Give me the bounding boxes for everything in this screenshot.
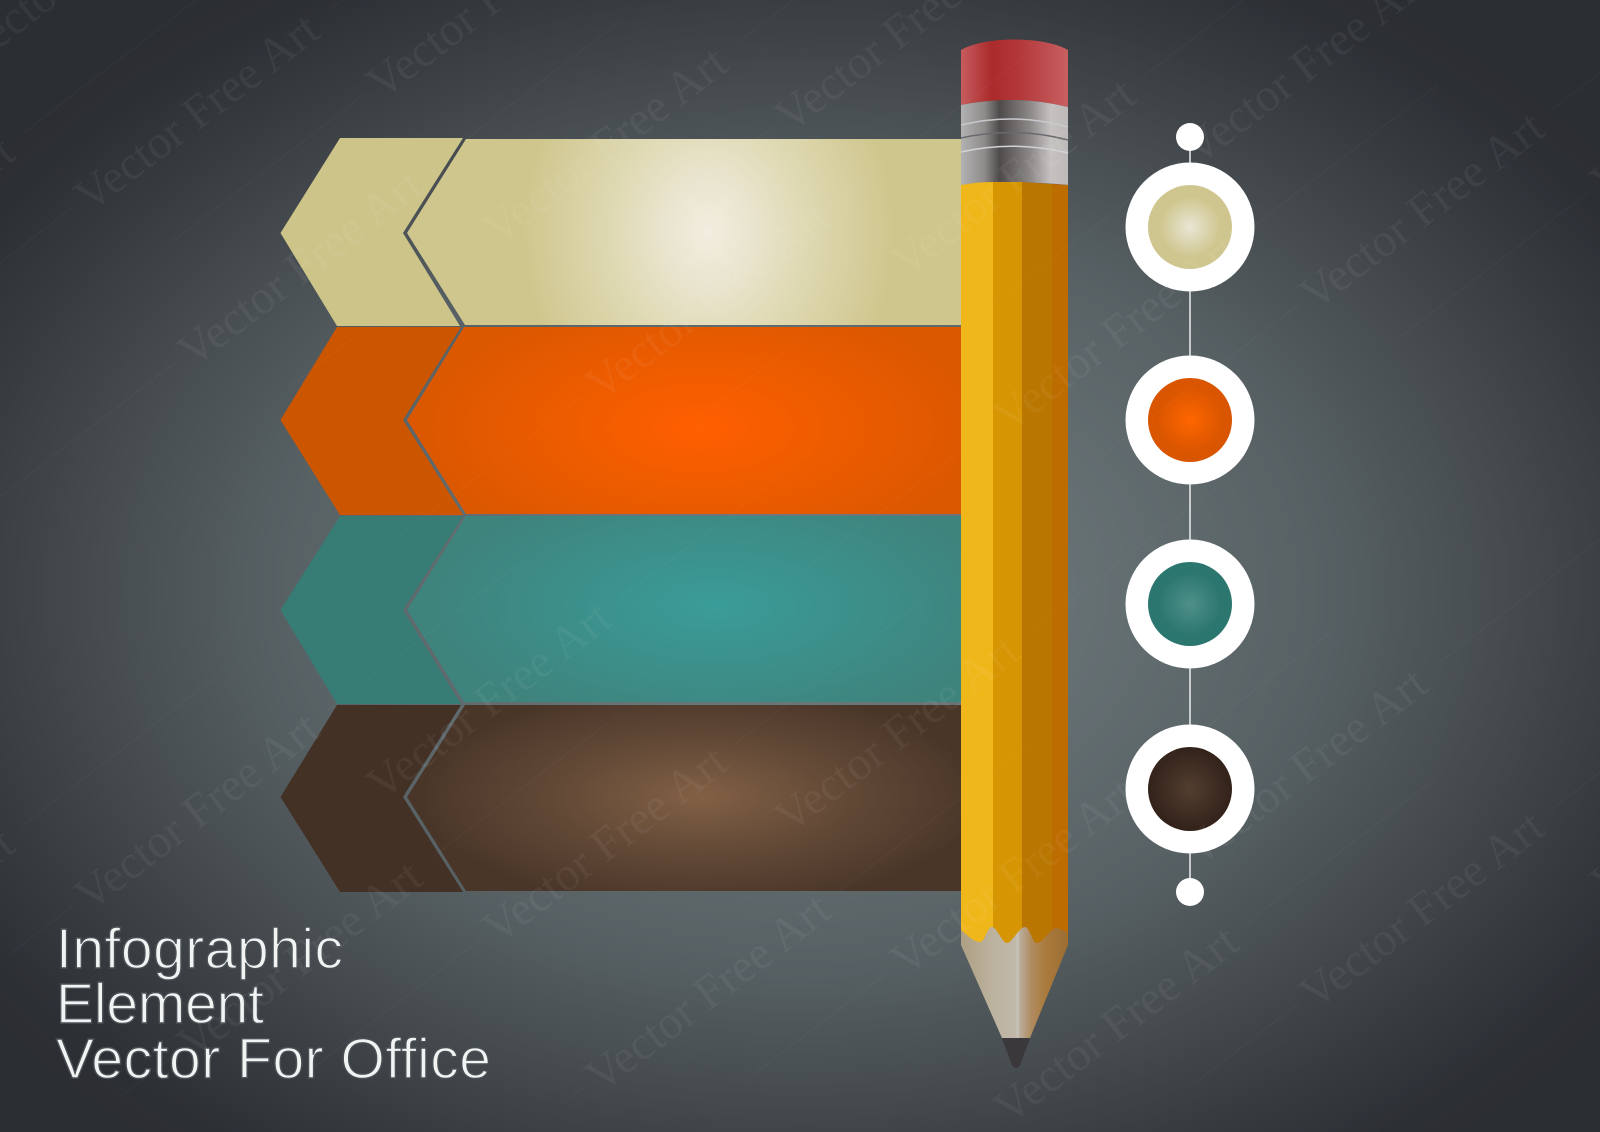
watermark pattern: Vector Free Art	[881, 767, 1145, 987]
panel: teal arrow bar	[280, 516, 961, 704]
watermark pattern: Vector Free Art	[1290, 800, 1554, 1020]
watermark pattern: Vector Free Art	[473, 735, 737, 955]
pencil wood tip	[961, 927, 1068, 1038]
panel: brown arrow bar	[280, 705, 961, 892]
timeline top dot	[1176, 123, 1204, 151]
title: Vector For Office	[56, 1027, 491, 1091]
timeline connector	[1176, 123, 1204, 892]
watermark pattern: Vector Free Art	[576, 883, 840, 1103]
watermark pattern: Vector Free Art	[357, 591, 621, 811]
icon: brown ring	[1126, 724, 1254, 854]
watermark pattern: Vector Free Art	[1173, 657, 1437, 877]
timeline bottom dot	[1176, 878, 1204, 906]
title	[56, 917, 491, 1091]
title: Infographic	[56, 917, 343, 981]
title: Element	[56, 972, 264, 1036]
watermark pattern: Vector Free Art	[168, 158, 432, 378]
watermark pattern: Vector Free Art	[65, 702, 329, 922]
icon: pencil	[961, 40, 1068, 1068]
icon: khaki ring	[1126, 162, 1254, 292]
watermark pattern: Vector Free Art	[881, 68, 1145, 288]
icon: teal ring	[1126, 540, 1254, 668]
watermark pattern: Vector Free Art	[984, 915, 1248, 1132]
watermark pattern: Vector Free Art	[765, 624, 1029, 844]
panel: orange arrow bar	[280, 327, 961, 515]
icon: orange ring	[1126, 356, 1254, 484]
panel: khaki arrow bar	[280, 138, 961, 326]
watermark pattern: Vector Free Art	[65, 3, 329, 223]
pencil body	[961, 182, 1068, 944]
watermark pattern: Vector Free Art	[1290, 101, 1554, 321]
watermark pattern: Vector Free Art	[984, 223, 1248, 443]
pencil eraser	[961, 40, 1068, 107]
watermark pattern: Vector Free Art	[576, 191, 840, 411]
watermark pattern: Vector Free Art	[473, 36, 737, 256]
watermark pattern: Vector Free Art	[168, 850, 432, 1070]
pencil ferrule	[961, 100, 1068, 185]
pencil lead	[1002, 1038, 1030, 1068]
